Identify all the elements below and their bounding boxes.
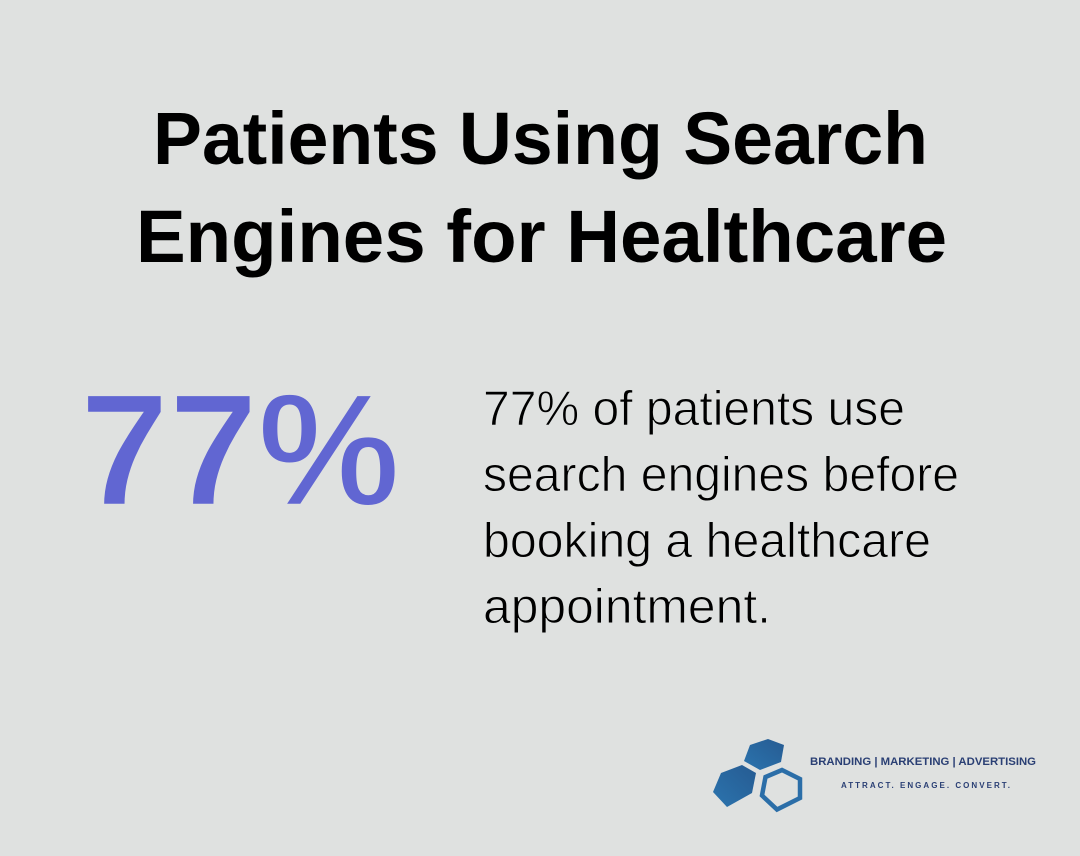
title: Patients Using Search — [153, 97, 928, 180]
logo tagline: attract engage convert: ATTRACT. ENGAGE. CONVERT. — [841, 781, 1010, 790]
logo tagline: services: BRANDING | MARKETING | ADVERTISING — [810, 756, 1036, 768]
description text: search engines before — [483, 448, 959, 502]
icon: outlined hexagon — [762, 770, 800, 810]
big statistic: 77%: 77% — [80, 360, 400, 539]
description text — [483, 382, 959, 634]
logo — [713, 739, 1036, 810]
description text: booking a healthcare — [483, 514, 931, 568]
icon: left filled hexagon — [713, 765, 756, 807]
icon: top filled hexagon — [744, 739, 784, 770]
description text: 77% of patients use — [483, 382, 905, 436]
title: Engines for Healthcare — [136, 195, 947, 278]
title — [136, 97, 947, 278]
description text: appointment. — [483, 580, 771, 634]
